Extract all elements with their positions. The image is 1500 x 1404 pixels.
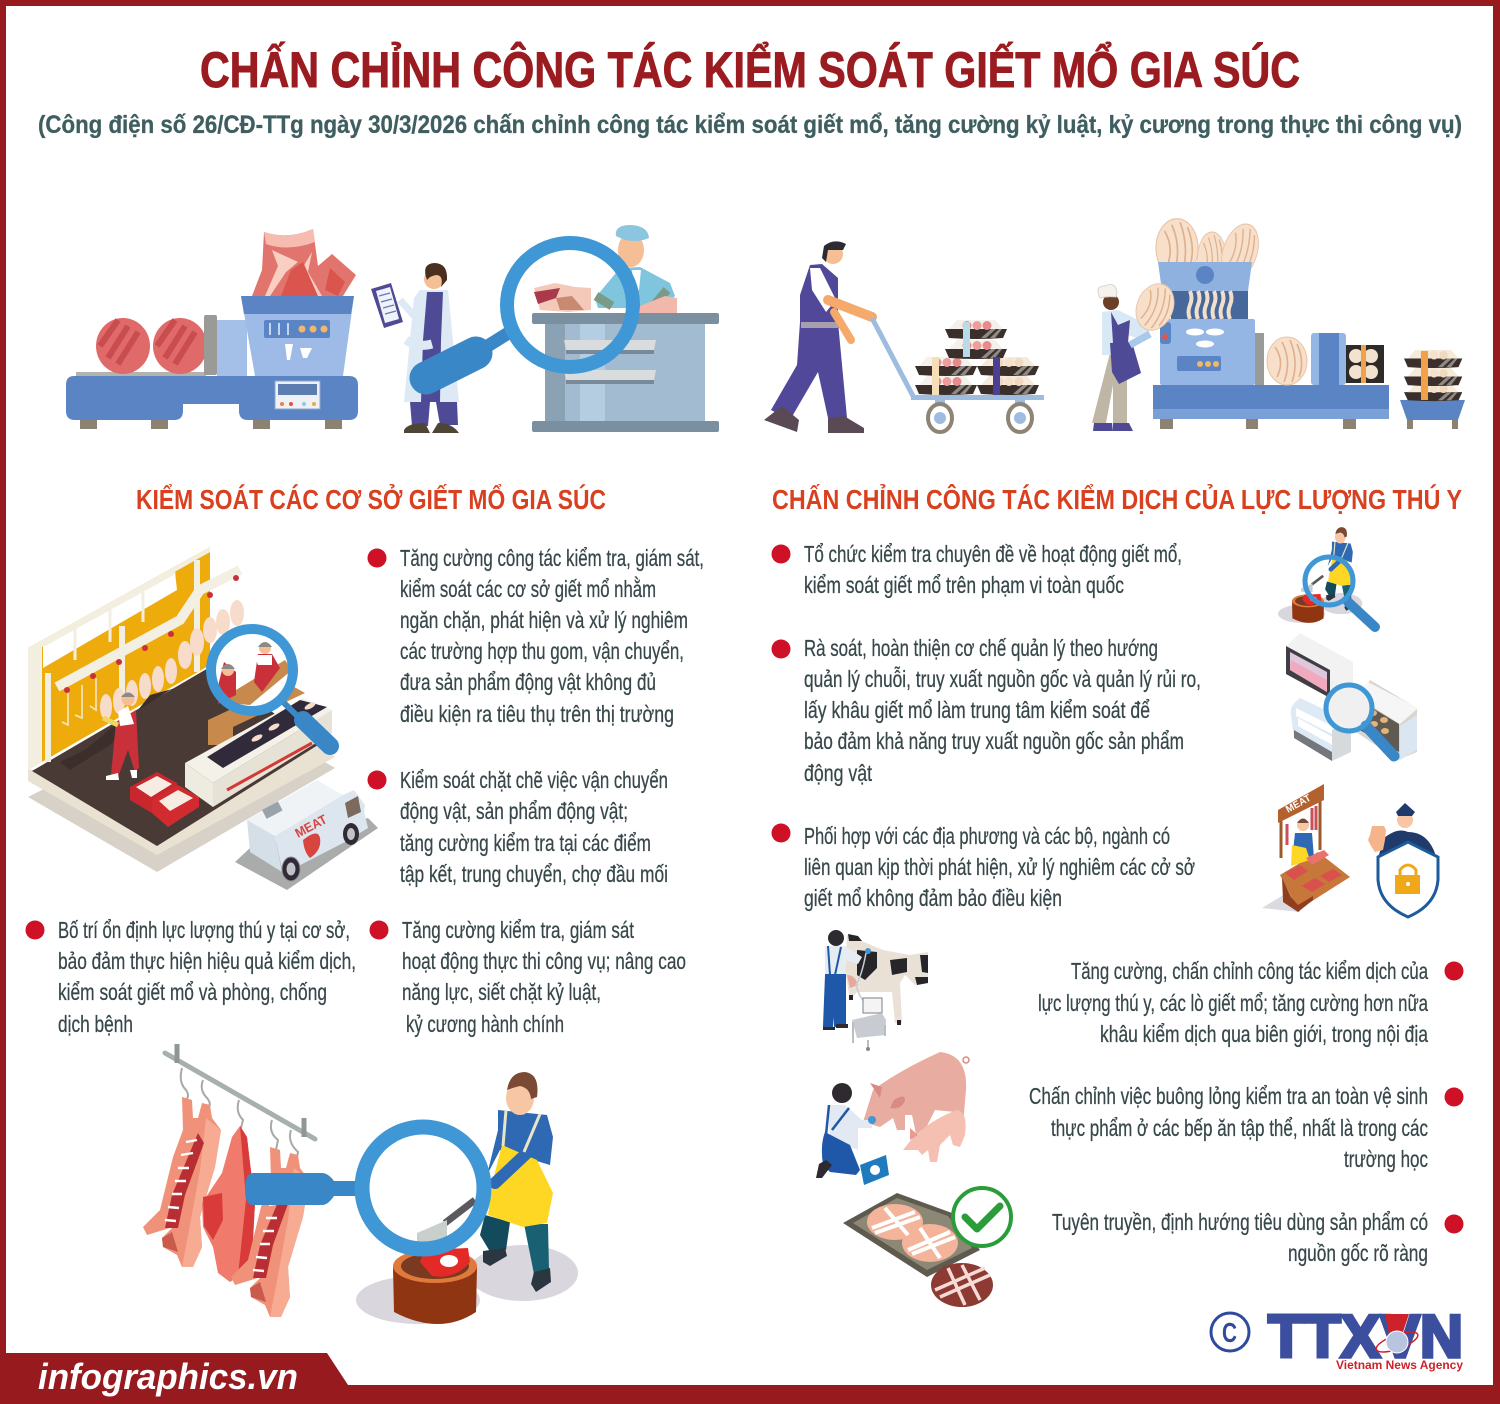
icon: vet examining cow	[823, 930, 928, 1051]
bullet list: right column bottom: trường học	[1344, 1146, 1428, 1172]
bullet list: left column: Bố trí ổn định lực lượng thú y tại cơ sở,	[58, 917, 350, 943]
logo: TTXVN: TTXVN	[1268, 1303, 1463, 1370]
icon: display fridges under magnifier	[1286, 633, 1418, 761]
icon: policeman with shield	[1368, 803, 1438, 917]
illustration: worker pushing trolley	[764, 241, 1044, 433]
illustration: chef at fish processing machine	[1092, 219, 1465, 431]
bullet list: left column: dịch bệnh	[58, 1011, 133, 1037]
icon: butcher under magnifier	[1278, 527, 1375, 627]
bullet list: left column: kiểm soát giết mổ và phòng, chống	[58, 979, 327, 1005]
bullet list: right column top: Rà soát, hoàn thiện cơ chế quản lý theo hướng	[804, 635, 1158, 661]
illustration: scientist with clipboard	[371, 263, 459, 433]
icon: copyright symbol: C	[1222, 1317, 1237, 1348]
bullet list: left column: hoạt động thực thi công vụ; nâng cao	[402, 948, 686, 974]
bullet list: right column bottom: nguồn gốc rõ ràng	[1288, 1240, 1428, 1266]
bullet list: right column top: quản lý chuỗi, truy xuất nguồn gốc và quản lý rủi ro,	[804, 666, 1201, 692]
bullet list: left column: tập kết, trung chuyển, chợ đầu mối	[400, 861, 668, 887]
illustration: meat delivery van	[235, 780, 378, 890]
bullet list: left column: tăng cường kiểm tra tại các điểm	[400, 830, 651, 856]
footer website label: infographics.vn	[38, 1356, 298, 1397]
bullet list: right column top: lấy khâu giết mổ làm trung tâm kiểm soát để	[804, 697, 1150, 723]
bullet list: left column: Tăng cường kiểm tra, giám sát	[402, 917, 634, 943]
bullet list: right column bottom	[1029, 958, 1464, 1266]
bullet list: left column	[26, 545, 704, 1037]
title: CHẤN CHỈNH CÔNG TÁC KIỂM SOÁT GIẾT MỔ GIA SÚC	[200, 41, 1300, 98]
illustration: hanging carcasses	[143, 1044, 315, 1317]
bullet list: left column: kiểm soát các cơ sở giết mổ nhằm	[400, 576, 656, 602]
bullet list: left column: Kiểm soát chặt chẽ việc vận chuyển	[400, 767, 668, 793]
bullet list: right column top: động vật	[804, 760, 872, 786]
bullet list: right column top	[772, 541, 1201, 911]
bullet list: right column top: bảo đảm khả năng truy xuất nguồn gốc sản phẩm	[804, 728, 1184, 754]
icon: meat market stall: MEAT	[1284, 793, 1313, 816]
heading: left column: KIỂM SOÁT CÁC CƠ SỞ GIẾT MỔ GIA SÚC	[136, 483, 606, 515]
icon: packaged meat tray with check mark	[843, 1188, 1011, 1307]
bullet list: right column top: liên quan kịp thời phát hiện, xử lý nghiêm các cở sở	[804, 854, 1195, 880]
illustration: meat delivery van: MEAT	[292, 811, 329, 841]
bullet list: right column top: Tổ chức kiểm tra chuyên đề về hoạt động giết mổ,	[804, 541, 1182, 567]
bullet list: right column top: kiểm soát giết mổ trên phạm vi toàn quốc	[804, 572, 1124, 598]
logo: TTXVN: Vietnam News Agency	[1336, 1358, 1463, 1372]
illustration: meat grinder machine	[66, 229, 358, 429]
bullet list: left column: ngăn chặn, phát hiện và xử lý nghiêm	[400, 607, 688, 633]
illustration: inspection table with worker and magnifier	[426, 225, 719, 432]
illustration: poultry slaughter line	[28, 547, 335, 872]
footer tab	[0, 1353, 1500, 1404]
icon: copyright symbol	[1211, 1313, 1249, 1351]
bullet list: left column: các trường hợp thu gom, vận chuyển,	[400, 638, 684, 664]
bullet list: left column: điều kiện ra tiêu thụ trên thị trường	[400, 701, 674, 727]
bullet list: left column: bảo đảm thực hiện hiệu quả kiểm dịch,	[58, 948, 356, 974]
illustration: butcher chopping meat with magnifier	[245, 1072, 578, 1324]
bullet list: left column: Tăng cường công tác kiểm tra, giám sát,	[400, 545, 704, 571]
bullet list: right column top: giết mổ không đảm bảo điều kiện	[804, 885, 1062, 911]
bullet list: left column: đưa sản phẩm động vật không đủ	[400, 669, 656, 695]
bullet list: left column: năng lực, siết chặt kỷ luật,	[402, 979, 601, 1005]
bullet list: right column top: Phối hợp với các địa phương và các bộ, ngành có	[804, 823, 1170, 849]
bullet list: left column: động vật, sản phẩm động vật;	[400, 798, 628, 824]
icon: meat market stall	[1262, 784, 1350, 912]
icon: vet examining pigs	[816, 1052, 969, 1185]
bullet list: left column: kỷ cương hành chính	[406, 1011, 564, 1037]
